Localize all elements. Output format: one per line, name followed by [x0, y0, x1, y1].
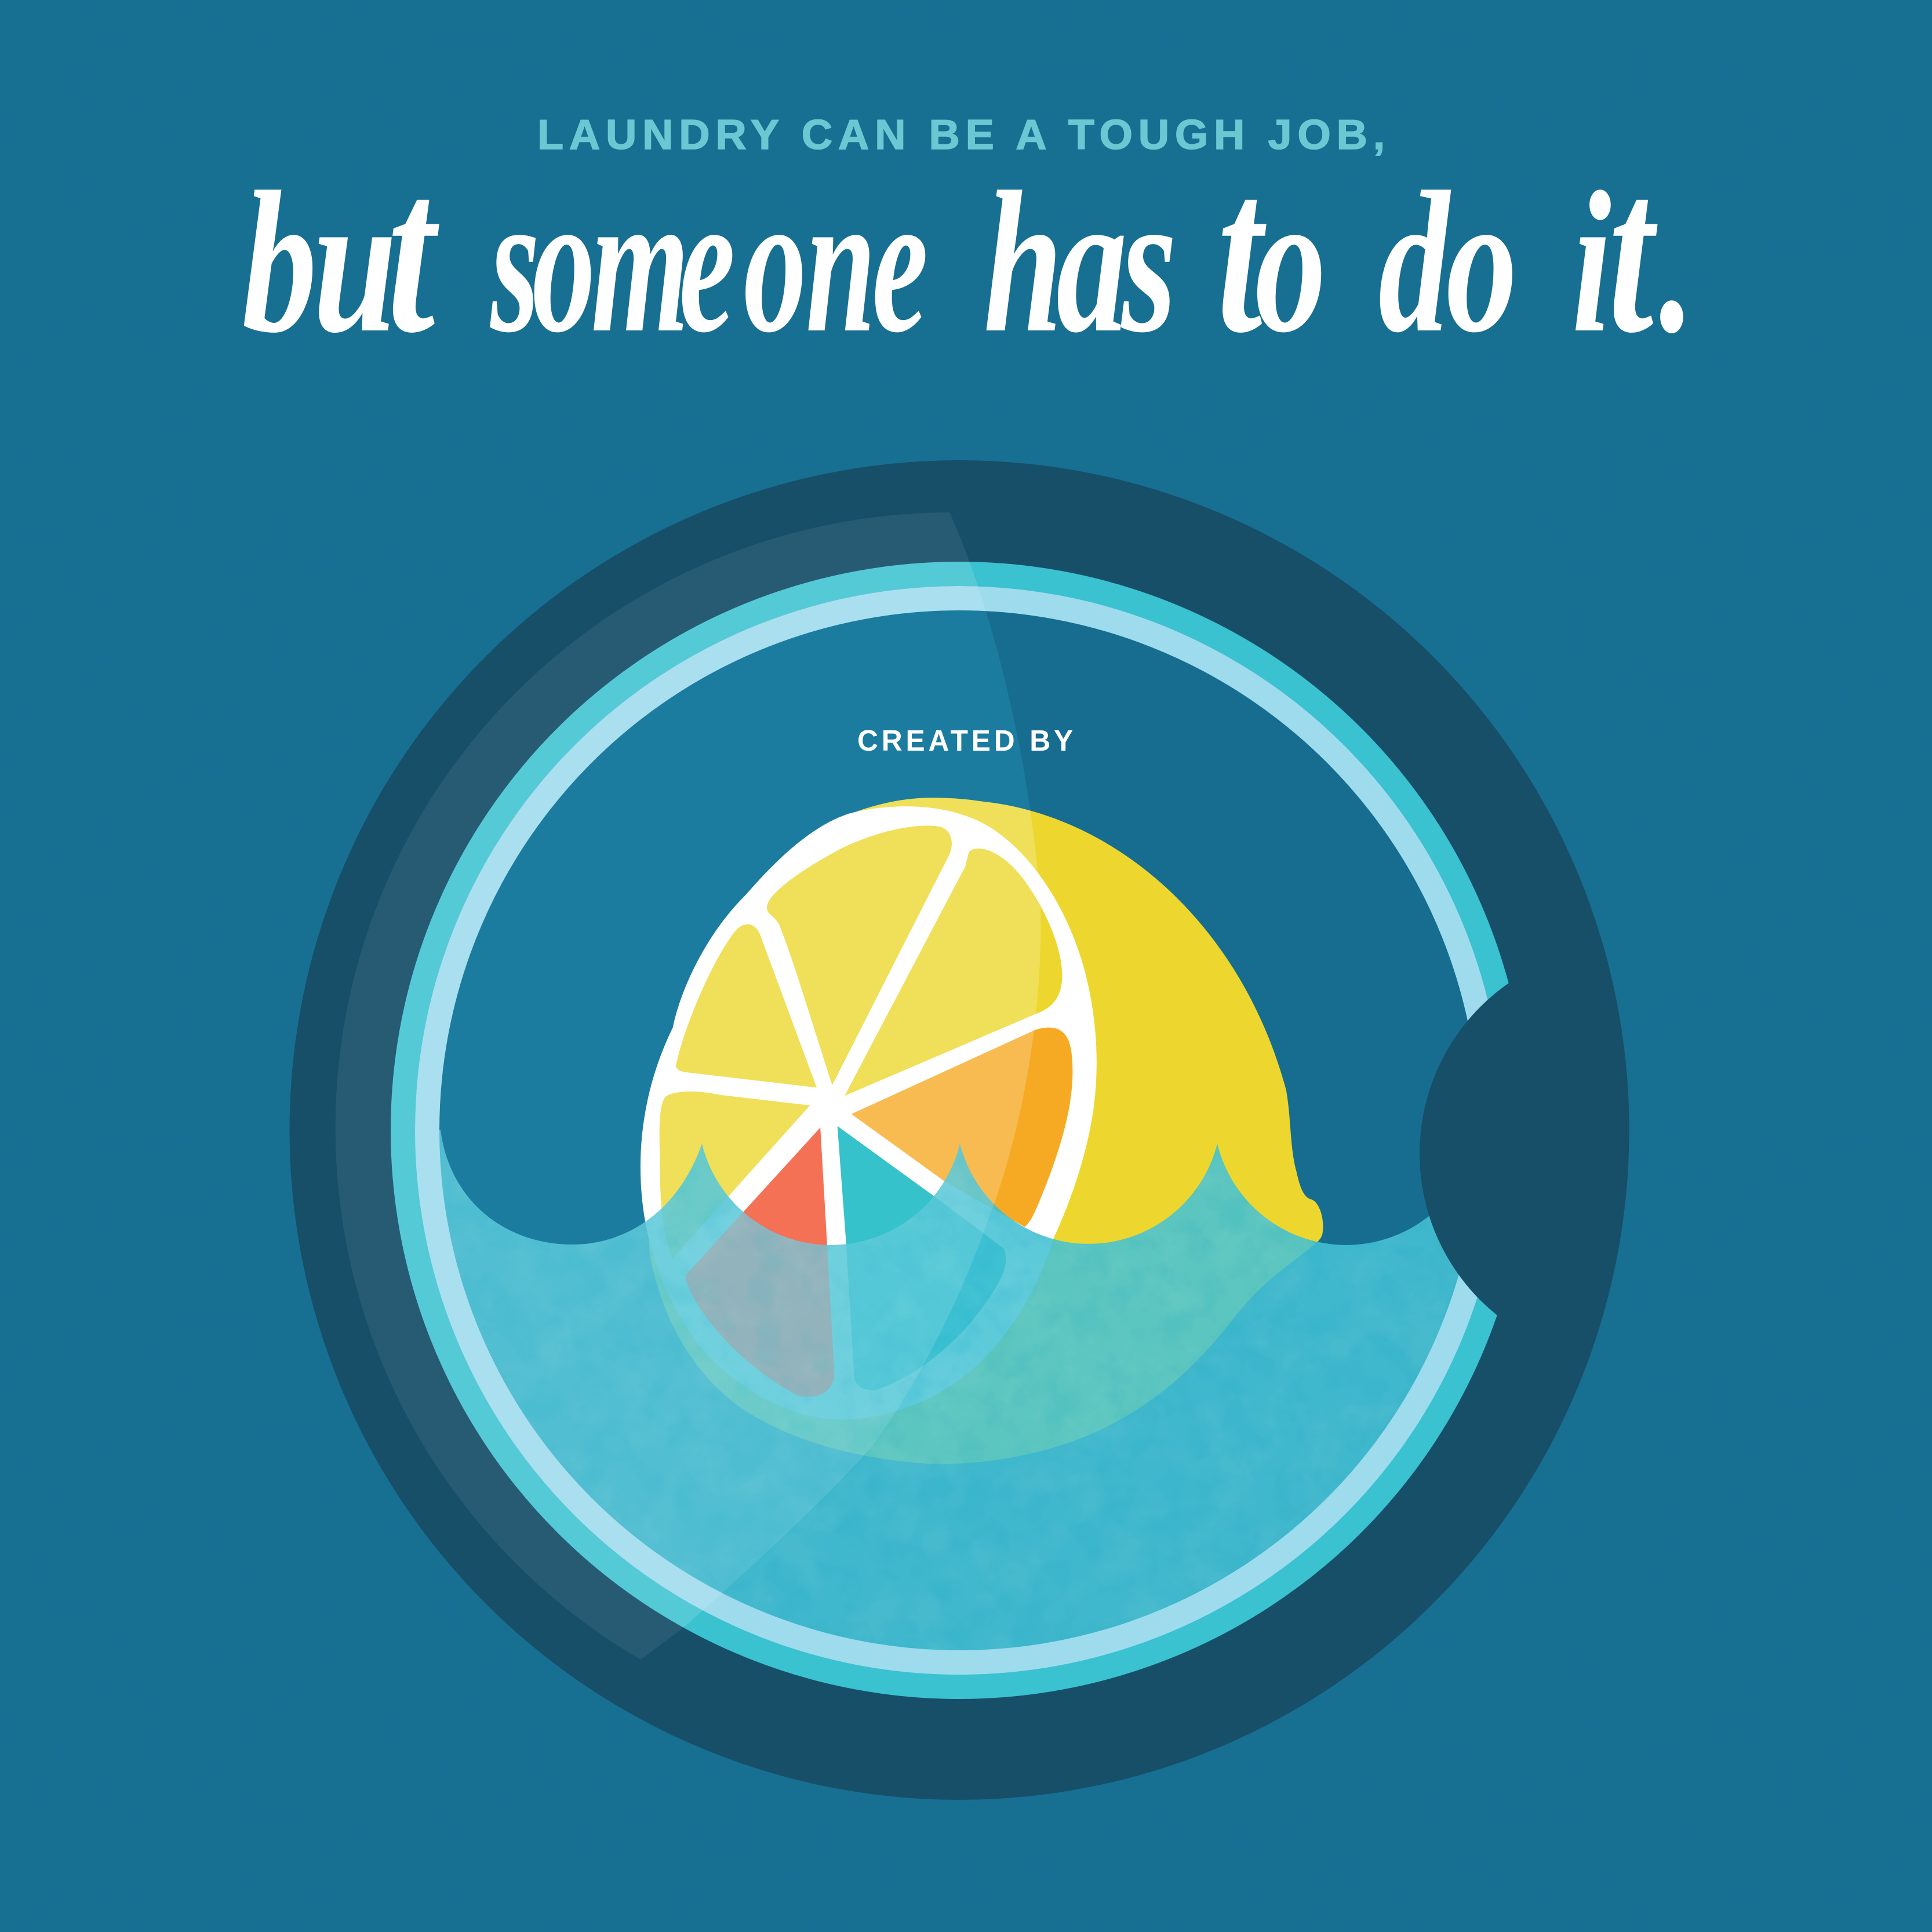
pale inner door ring	[427, 598, 1491, 1662]
door outer dark ring	[290, 460, 1629, 1800]
reflection tint on water	[336, 512, 1040, 1660]
door handle notch	[1420, 946, 1835, 1361]
left segment	[676, 925, 817, 1087]
teal door ring	[403, 574, 1516, 1687]
submerged red segment tint	[686, 1212, 835, 1397]
highlight tint on lemon	[660, 798, 1041, 1245]
lower left segment	[660, 1091, 810, 1258]
script headline: do	[1378, 151, 1517, 374]
glass reflection highlight	[336, 512, 1040, 1660]
glass highlight on interior	[439, 610, 1031, 1245]
door glass interior	[414, 585, 1504, 1675]
subtitle: LAUNDRY CAN BE A TOUGH JOB,	[537, 112, 1391, 158]
top segment	[767, 825, 952, 1085]
white pith	[641, 806, 1097, 1420]
washing machine door	[290, 460, 1629, 1800]
script headline: someone	[489, 150, 928, 374]
water waves	[415, 1130, 1478, 1675]
infographic canvas	[243, 119, 1683, 1800]
script headline: has	[984, 151, 1177, 374]
lemon	[640, 798, 1323, 1464]
script headline: it.	[1572, 123, 1695, 381]
script headline	[242, 123, 1695, 381]
upper right segment	[845, 849, 1062, 1096]
water texture	[441, 1159, 1440, 1650]
orange segment	[852, 1028, 1072, 1227]
created by label: CREATED BY	[857, 724, 1076, 757]
lemon cut face segments	[641, 806, 1097, 1420]
script headline: to	[1217, 123, 1326, 381]
teal segment	[838, 1126, 1006, 1391]
lemon rind body	[649, 798, 1323, 1464]
script headline: but	[242, 124, 441, 381]
reflection tint on rings	[391, 562, 978, 1628]
red segment	[686, 1127, 834, 1396]
